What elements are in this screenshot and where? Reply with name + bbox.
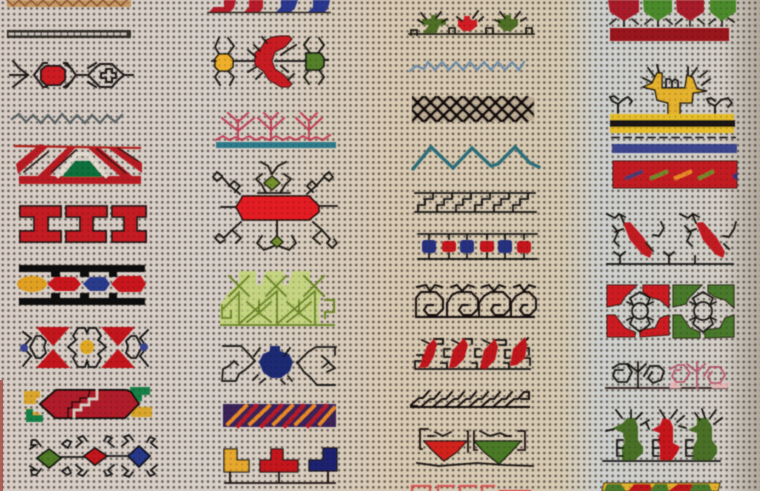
beads row xyxy=(418,234,537,259)
pink partial row at bottom xyxy=(412,486,530,491)
teal mountain zigzag xyxy=(413,147,539,169)
green and red sprouts on border xyxy=(409,11,534,35)
green lattice motif xyxy=(220,271,334,326)
light blue wave xyxy=(410,62,524,71)
three diamond rosettes xyxy=(30,435,157,477)
red and black flower band xyxy=(20,327,148,368)
yellow bird motif xyxy=(610,65,732,115)
partial coloured row at bottom xyxy=(602,483,720,491)
black and pink spirals xyxy=(606,362,730,388)
three red I blocks xyxy=(20,206,146,242)
blue star motif xyxy=(222,346,336,385)
column 2 motifs xyxy=(208,0,337,483)
column 1 motifs xyxy=(7,0,157,477)
diagonal striped band xyxy=(223,404,336,427)
red S-curve band xyxy=(24,387,152,422)
top partial coloured row xyxy=(208,0,330,12)
red diagonals with black tendrils xyxy=(607,214,736,264)
black chain band xyxy=(7,30,131,38)
red and green fruits xyxy=(608,0,736,26)
red and green bowls xyxy=(417,429,533,466)
black key meander band xyxy=(415,193,536,212)
black and red geometric border xyxy=(10,61,133,87)
orange zigzag band xyxy=(7,0,131,7)
column 3 motifs xyxy=(399,11,540,491)
dark red bar xyxy=(610,28,729,41)
striped band with coloured beads xyxy=(17,265,146,305)
green and red cactus trees xyxy=(603,409,722,461)
big red hexagon rosette xyxy=(213,162,337,250)
black spiral row xyxy=(416,285,536,317)
grey wave line xyxy=(12,114,122,123)
red triangle band xyxy=(15,144,142,184)
yellow red blue stepped blocks xyxy=(224,448,337,483)
red patterned bar xyxy=(613,161,737,188)
black stepped zigzag band xyxy=(411,391,529,407)
red leaves row xyxy=(415,337,530,369)
red and green medallion squares xyxy=(607,285,734,338)
blue bar xyxy=(612,144,737,153)
black lattice band xyxy=(399,97,540,121)
pink trees on teal bar xyxy=(216,113,336,148)
column 4 motifs xyxy=(602,0,737,491)
crescent motif with yellow and green squares xyxy=(212,36,328,87)
yellow and black stripes xyxy=(610,114,735,138)
